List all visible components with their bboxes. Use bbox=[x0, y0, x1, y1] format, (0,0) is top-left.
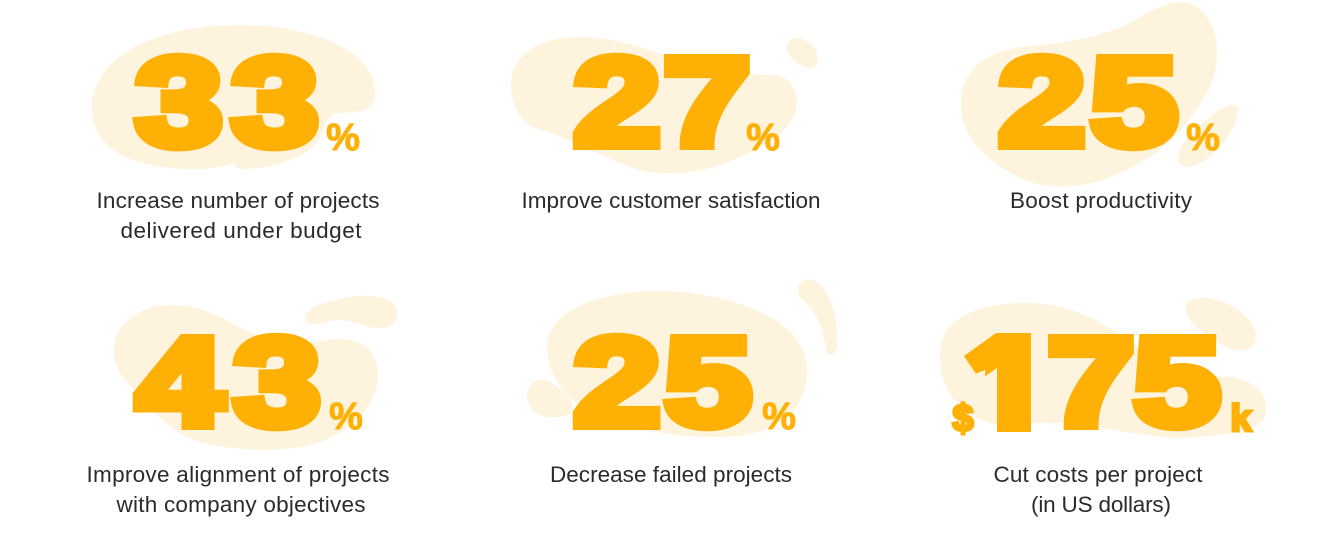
caption: with company objectives bbox=[116, 492, 366, 517]
caption: Improve customer satisfaction bbox=[522, 188, 820, 213]
number 43 bbox=[137, 312, 320, 452]
caption: Decrease failed projects bbox=[550, 462, 792, 487]
number 25: 2 bbox=[574, 312, 660, 452]
number 175: 1 bbox=[955, 312, 1059, 452]
number 27 bbox=[574, 32, 750, 172]
number 25: 2 bbox=[999, 32, 1085, 172]
small blob bbox=[787, 38, 818, 68]
number 25: 5 bbox=[1091, 32, 1177, 172]
k suffix: k bbox=[1230, 398, 1252, 440]
percent sign: % bbox=[329, 396, 363, 438]
caption: (in US dollars) bbox=[1031, 492, 1171, 517]
number 25 bbox=[999, 32, 1177, 172]
small blob bbox=[305, 296, 397, 328]
blob background bbox=[547, 291, 807, 437]
number 25 bbox=[574, 312, 751, 452]
stat: 43% alignment bbox=[86, 296, 397, 517]
percent sign: % bbox=[746, 117, 780, 159]
caption: delivered under budget bbox=[120, 218, 362, 243]
stat: 25% productivity bbox=[961, 2, 1238, 213]
blob background bbox=[511, 37, 797, 173]
percent sign: % bbox=[1186, 117, 1220, 159]
blob background bbox=[92, 25, 375, 169]
blob background bbox=[961, 2, 1217, 187]
number 175: 7 bbox=[1048, 312, 1134, 452]
dollar sign: $ bbox=[952, 398, 974, 440]
caption bbox=[96, 188, 380, 243]
caption bbox=[994, 462, 1203, 517]
blob background bbox=[940, 303, 1266, 438]
small blob right bbox=[798, 279, 837, 355]
caption: Cut costs per project bbox=[994, 462, 1203, 487]
stat: 27% customer satisfaction bbox=[511, 32, 820, 213]
number 27: 2 bbox=[574, 32, 660, 172]
small blob bbox=[1186, 298, 1256, 350]
stat: 33% under budget bbox=[92, 25, 380, 243]
number 33: 3 bbox=[136, 32, 222, 172]
number 43: 3 bbox=[234, 312, 320, 452]
number 175: 5 bbox=[1134, 312, 1220, 452]
caption bbox=[86, 462, 390, 517]
number 33: 3 bbox=[232, 32, 318, 172]
stat: $175k cost cut bbox=[940, 298, 1266, 517]
number 43: 4 bbox=[137, 312, 223, 452]
caption: Improve alignment of projects bbox=[86, 462, 390, 487]
number 33 bbox=[136, 32, 318, 172]
small blob bbox=[1178, 105, 1238, 167]
number 25: 5 bbox=[665, 312, 751, 452]
blob background bbox=[114, 305, 378, 450]
number 175 bbox=[964, 333, 1222, 432]
percent sign: % bbox=[326, 117, 360, 159]
percent sign: % bbox=[762, 396, 796, 438]
small blob left bbox=[527, 380, 573, 417]
caption: Increase number of projects bbox=[96, 188, 380, 213]
stat: 25% failed projects bbox=[527, 279, 837, 487]
caption: Boost productivity bbox=[1010, 188, 1193, 213]
number 27: 7 bbox=[664, 32, 750, 172]
